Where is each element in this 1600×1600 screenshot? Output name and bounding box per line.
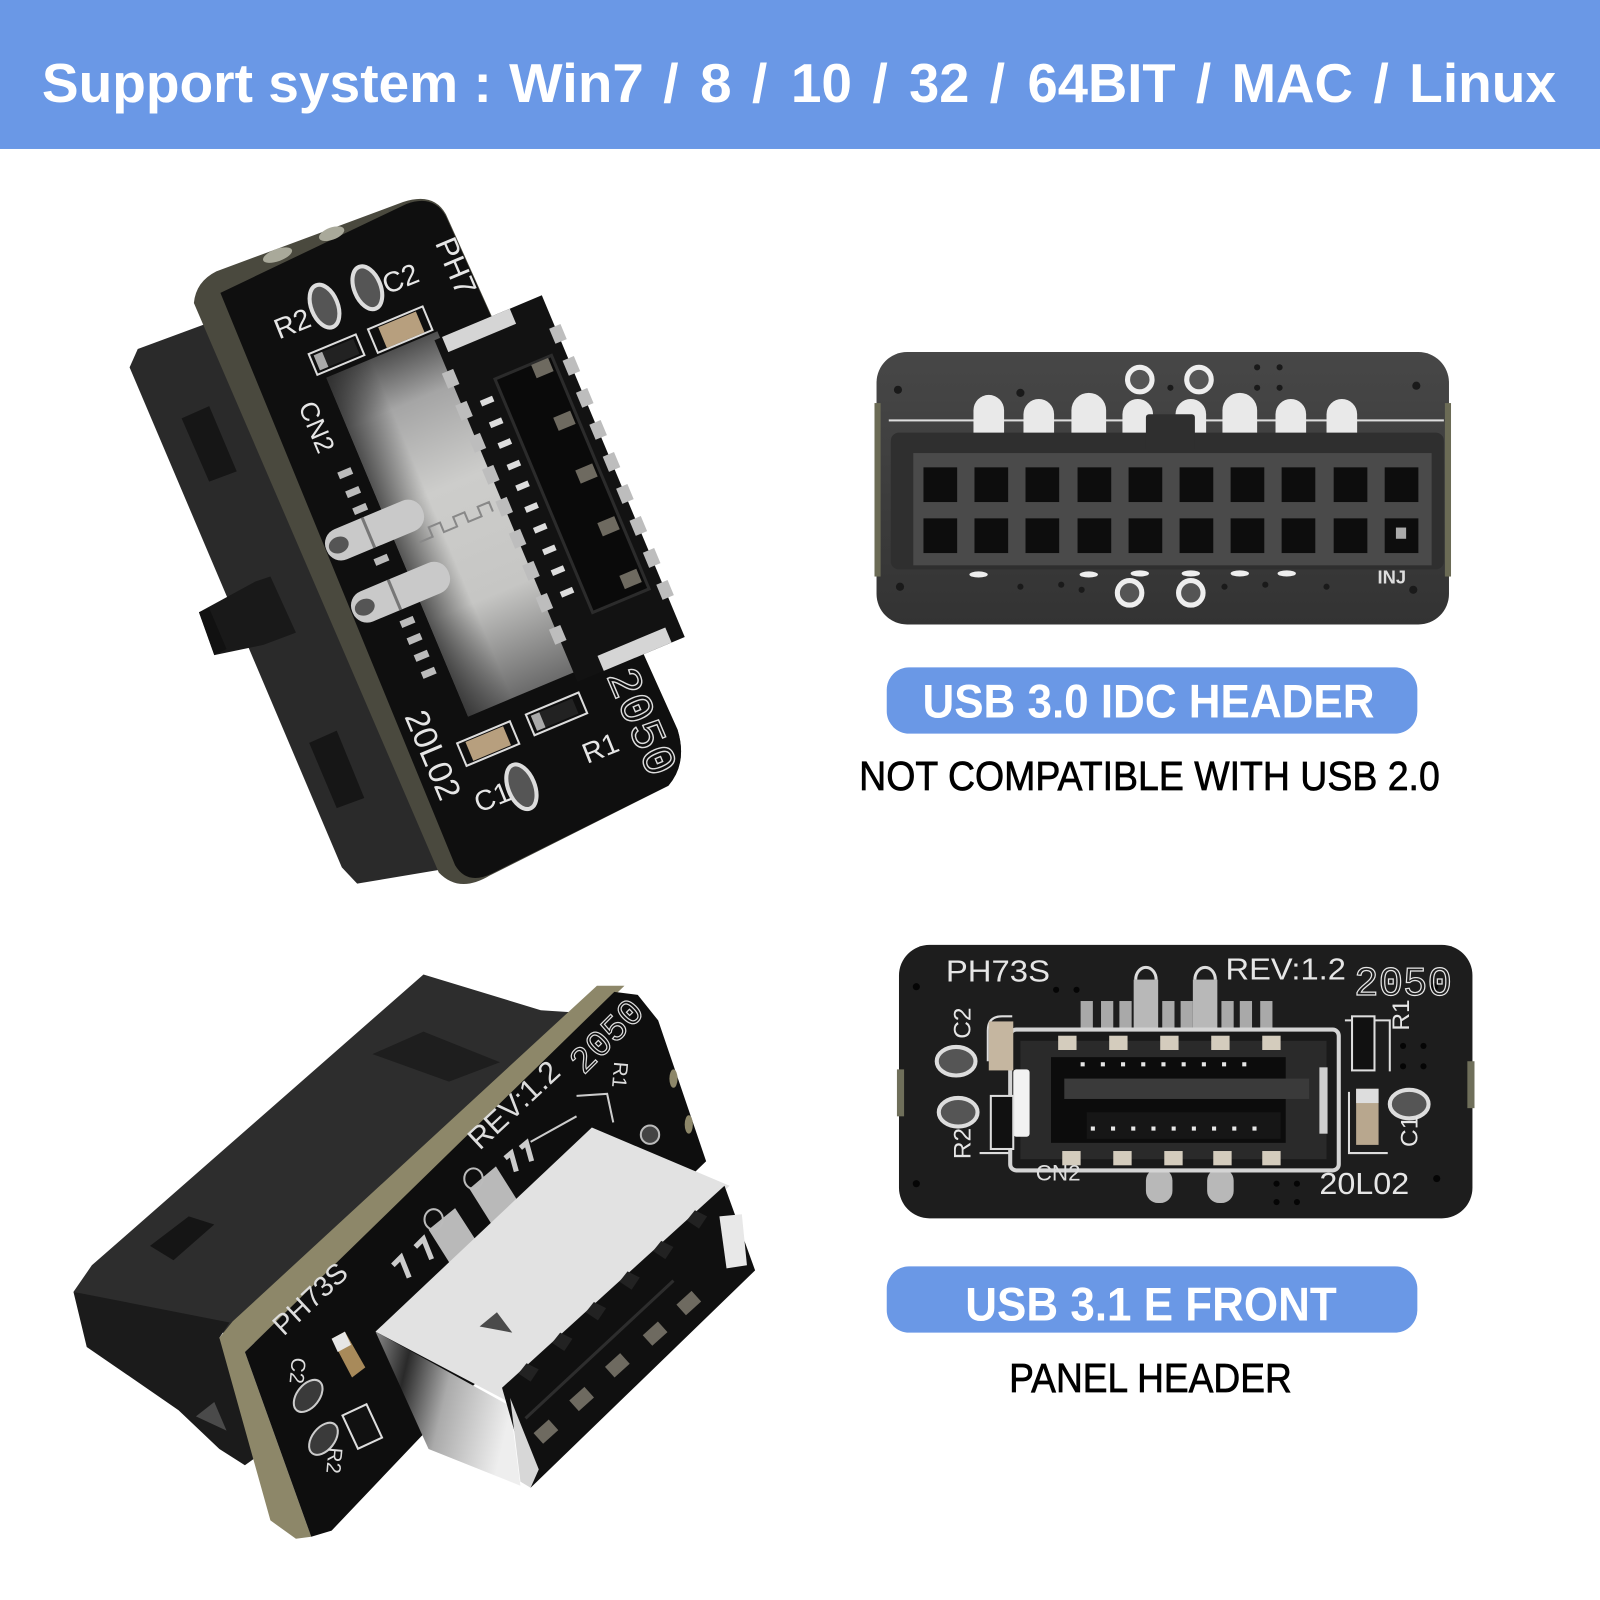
header banner: Linux bbox=[1409, 52, 1556, 114]
product photo: USB 3.1 E front panel socket view: C2 bbox=[949, 1007, 976, 1039]
header banner: / bbox=[990, 52, 1005, 114]
header banner: / bbox=[752, 52, 767, 114]
header banner: 32 bbox=[909, 52, 969, 114]
product photo: adapter angled view, top left bbox=[130, 199, 704, 884]
product photo: USB 3.1 E front panel socket view: PH73S bbox=[946, 955, 1050, 989]
pill label: USB 3.0 IDC HEADER: USB 3.0 IDC HEADER bbox=[922, 675, 1374, 727]
header banner: 10 bbox=[791, 52, 852, 114]
product photo: USB 3.1 E front panel socket view: R1 bbox=[1388, 999, 1415, 1031]
compatibility note: NOT COMPATIBLE WITH USB 2.0 bbox=[859, 753, 1440, 799]
product photo: adapter angled view, top left: R2 bbox=[270, 303, 315, 346]
product photo: adapter angled view, top left: CN2 bbox=[292, 397, 341, 457]
header banner bbox=[0, 0, 1600, 149]
header banner: / bbox=[872, 52, 888, 114]
product photo: adapter angled view, bottom left: REV:1.2 bbox=[461, 1054, 567, 1156]
product photo: USB 3.0 IDC socket front view bbox=[874, 352, 1451, 624]
product photo: adapter angled view, bottom left: R1 bbox=[607, 1061, 631, 1089]
header banner: MAC bbox=[1232, 52, 1353, 114]
product photo: adapter angled view, bottom left bbox=[73, 974, 755, 1539]
product photo: adapter angled view, bottom left: R2 bbox=[321, 1447, 346, 1474]
product photo: USB 3.1 E front panel socket view: CN2 bbox=[1036, 1161, 1081, 1186]
header banner: Support system : bbox=[42, 52, 492, 114]
pill label: USB 3.1 E FRONT: USB 3.1 E FRONT bbox=[965, 1278, 1337, 1330]
header banner: / bbox=[663, 52, 679, 114]
pill label: USB 3.1 E FRONT bbox=[887, 1266, 1417, 1333]
product photo: adapter angled view, top left: C1 bbox=[470, 776, 515, 819]
product photo: USB 3.0 IDC socket front view: INJ bbox=[1378, 567, 1406, 588]
header banner: / bbox=[1373, 52, 1389, 114]
product photo: adapter angled view, top left: PH7 bbox=[428, 232, 483, 300]
product photo: adapter angled view, top left: C2 bbox=[378, 258, 424, 301]
product photo: adapter angled view, top left: 2050 bbox=[592, 661, 685, 785]
product photo: adapter angled view, top left: 20L02 bbox=[397, 705, 467, 806]
product photo: adapter angled view, bottom left: C2 bbox=[285, 1357, 309, 1385]
header banner: 64BIT bbox=[1028, 52, 1176, 114]
product photo: USB 3.1 E front panel socket view: 2050 bbox=[1354, 962, 1452, 1008]
product photo: USB 3.1 E front panel socket view: C1 bbox=[1396, 1116, 1423, 1147]
panel header note: PANEL HEADER bbox=[1009, 1355, 1292, 1401]
header banner: / bbox=[1196, 52, 1211, 114]
product photo: USB 3.1 E front panel socket view: R2 bbox=[949, 1128, 976, 1159]
header banner: Win7 bbox=[509, 52, 644, 114]
product photo: adapter angled view, bottom left: 2050 bbox=[562, 992, 654, 1084]
product photo: USB 3.1 E front panel socket view bbox=[897, 945, 1474, 1218]
product photo: adapter angled view, top left: R1 bbox=[578, 727, 624, 770]
product photo: adapter angled view, bottom left: PH73S bbox=[267, 1257, 355, 1342]
product photo: USB 3.1 E front panel socket view: 20L02 bbox=[1319, 1167, 1409, 1201]
header banner: 8 bbox=[700, 52, 732, 114]
product photo: USB 3.1 E front panel socket view: REV:1.2 bbox=[1226, 953, 1346, 987]
